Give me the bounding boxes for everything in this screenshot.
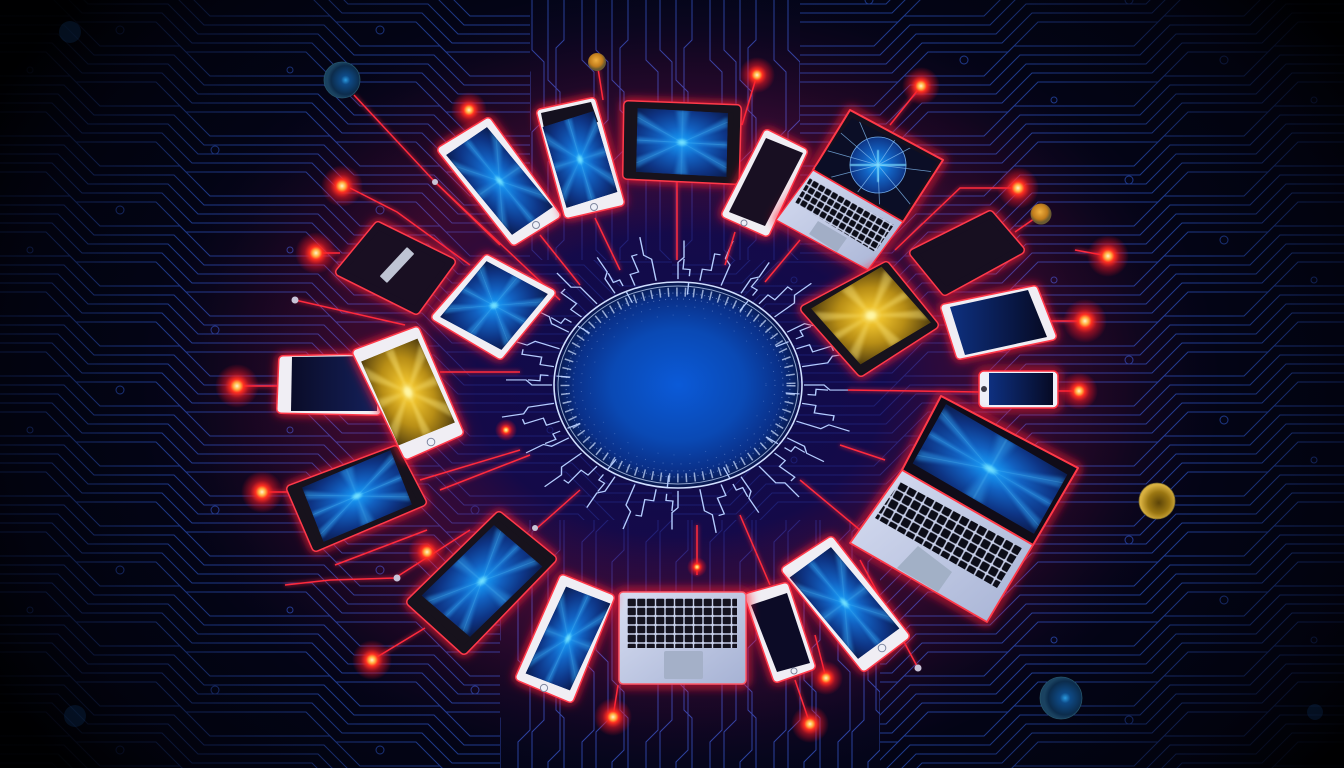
small gold orb right <box>1030 204 1052 224</box>
large gold orb <box>1139 483 1175 519</box>
outer ring lines <box>554 282 802 488</box>
device: tablet left <box>291 450 422 547</box>
device: phone bottom left <box>520 579 610 698</box>
laptop screen burst <box>815 118 936 217</box>
device: dark phone bottom <box>749 587 811 678</box>
laptop keyboard <box>795 178 894 252</box>
red connection lines <box>237 62 1108 724</box>
large laptop keyboard <box>875 482 1022 588</box>
trackpad <box>664 651 703 679</box>
central blue core with circuit ring <box>501 236 855 534</box>
device: large laptop <box>850 396 1078 622</box>
device: phone right <box>945 290 1052 355</box>
device: small phone right <box>979 371 1058 408</box>
device: gold tablet <box>805 266 934 372</box>
small gold orb top <box>588 53 606 71</box>
device: gold phone <box>357 331 459 455</box>
device: dark phone top <box>726 134 803 232</box>
device: laptop top right <box>776 110 945 270</box>
device: dark phone with label <box>340 226 451 310</box>
device: phone with starburst, top <box>541 102 620 214</box>
device: tablet bottom left <box>411 516 552 650</box>
device: phone with starburst, upper left <box>442 122 556 241</box>
device: laptop base bottom <box>619 592 746 684</box>
device: phone lower right <box>786 541 905 667</box>
device: phone behind gold phone <box>281 356 377 411</box>
device: tablet top centre <box>627 105 737 180</box>
core speckles <box>566 293 790 477</box>
large laptop screen <box>912 404 1068 534</box>
white label <box>380 247 414 283</box>
teal orb upper left <box>324 62 360 98</box>
radial traces <box>501 236 855 534</box>
device: small tablet <box>436 259 551 355</box>
white junction nodes <box>292 179 922 672</box>
teal orb lower right <box>1040 677 1082 719</box>
red LED nodes <box>215 57 1129 743</box>
device: dark phone right <box>914 215 1020 291</box>
keyboard <box>627 598 737 648</box>
large laptop trackpad <box>897 546 952 592</box>
laptop trackpad <box>809 221 847 252</box>
